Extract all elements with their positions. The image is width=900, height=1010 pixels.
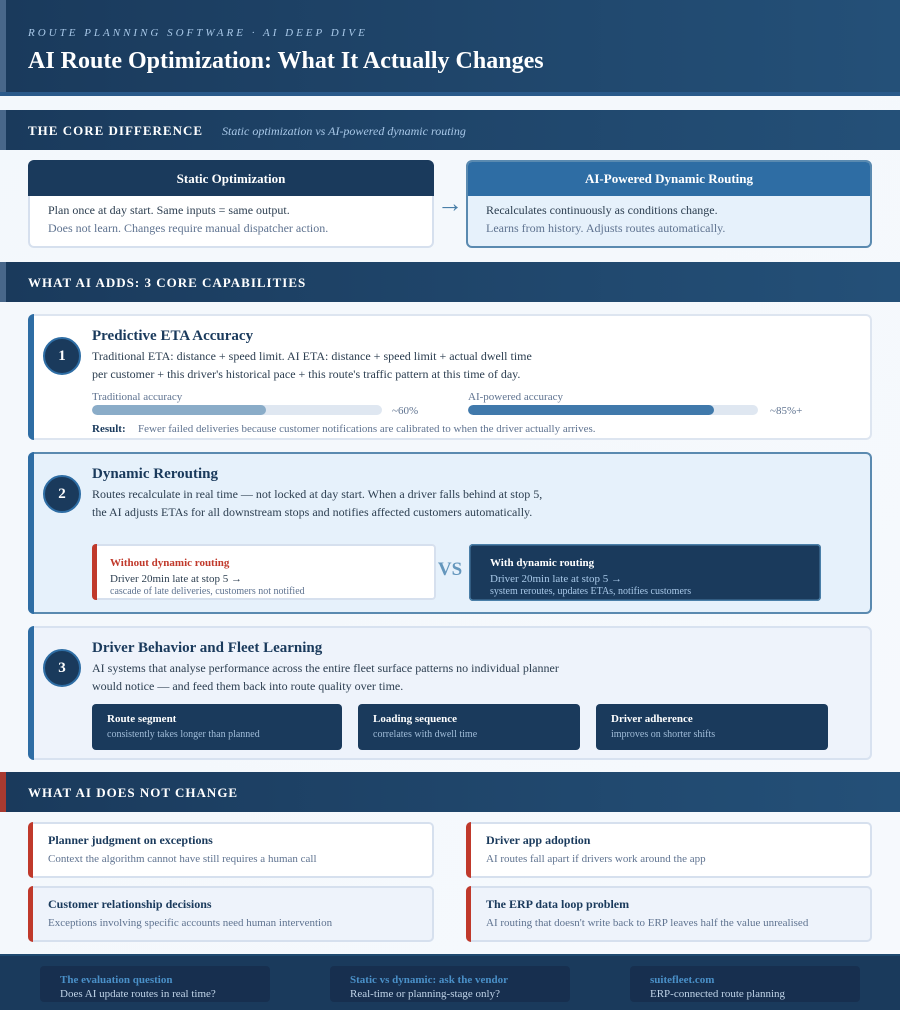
capability 1 description: per customer + this driver's historical pace + this route's traffic pattern at this time of day. — [92, 367, 520, 381]
chip: driver adherence: Driver adherence — [611, 713, 693, 725]
result line: Result: — [92, 423, 126, 435]
chip: loading sequence: Loading sequence — [373, 713, 457, 725]
card: planner judgment — [28, 822, 434, 878]
chip: route segment — [92, 704, 342, 750]
capability 1 title: Predictive ETA Accuracy — [92, 328, 253, 344]
card: customer relationship — [28, 886, 434, 942]
arrow: static to dynamic: → — [437, 189, 463, 218]
panel: capability 1 predictive ETA — [28, 314, 872, 440]
static heading — [28, 160, 434, 196]
capability 1 description — [92, 349, 532, 381]
footer — [0, 954, 900, 1010]
footer: suitefleet: suitefleet.com — [650, 974, 714, 986]
section heading: what AI adds: WHAT AI ADDS: 3 CORE CAPABILITIES — [28, 275, 306, 290]
panel: static optimization — [28, 160, 434, 248]
capability 2 description: Routes recalculate in real time — not locked at day start. When a driver falls behind at stop 5, — [92, 487, 542, 501]
header banner — [0, 0, 900, 96]
card: customer relationship: Customer relationship decisions — [48, 897, 212, 911]
card: driver app adoption: AI routes fall apart if drivers work around the app — [486, 853, 706, 865]
chip: driver adherence: improves on shorter shifts — [611, 729, 715, 740]
without dynamic routing box: Without dynamic routing — [110, 557, 229, 569]
card: planner judgment: Planner judgment on exceptions — [48, 833, 213, 847]
dynamic heading: AI-Powered Dynamic Routing — [585, 171, 753, 186]
bar: AI-powered accuracy — [468, 391, 802, 417]
VS label: VS — [438, 559, 462, 580]
footer: ask the vendor: Real-time or planning-stage only? — [350, 988, 500, 1000]
capability 2 description — [92, 487, 542, 519]
bar: traditional accuracy: Traditional accuracy — [92, 391, 182, 403]
with dynamic routing box — [469, 544, 821, 601]
number badge 1 — [43, 337, 81, 375]
static text — [48, 203, 328, 235]
chip: route segment: Route segment — [107, 713, 176, 725]
card: ERP data loop: The ERP data loop problem — [486, 897, 629, 911]
with dynamic routing box: With dynamic routing — [490, 557, 594, 569]
dynamic heading — [466, 160, 872, 196]
capability 1 description: Traditional ETA: distance + speed limit. AI ETA: distance + speed limit + actual dwell time — [92, 349, 532, 363]
panel: AI-powered dynamic routing — [466, 160, 872, 248]
card: driver app adoption — [466, 822, 872, 878]
card: planner judgment: Context the algorithm cannot have still requires a human call — [48, 853, 317, 865]
section heading: what AI adds — [0, 262, 900, 302]
bar: AI-powered accuracy: AI-powered accuracy — [468, 391, 563, 403]
with dynamic routing box: Driver 20min late at stop 5 → — [490, 573, 622, 585]
without dynamic routing box: cascade of late deliveries, customers not notified — [110, 586, 305, 597]
capability 3 description: would notice — and feed them back into route quality over time. — [92, 679, 403, 693]
title: AI Route Optimization: What It Actually Changes — [28, 48, 544, 74]
card: ERP data loop: AI routing that doesn't write back to ERP leaves half the value unrealised — [486, 917, 808, 929]
chip: loading sequence: correlates with dwell time — [373, 729, 477, 740]
footer: ask the vendor: Static vs dynamic: ask the vendor — [350, 974, 508, 986]
card: customer relationship: Exceptions involving specific accounts need human intervention — [48, 917, 332, 929]
result line: Fewer failed deliveries because customer notifications are calibrated to when the driver actually arrives. — [138, 423, 596, 435]
footer: ask the vendor — [330, 966, 570, 1002]
section heading: the core difference — [0, 110, 900, 150]
section heading: what AI does not change — [0, 772, 900, 812]
footer: evaluation question: The evaluation question — [60, 974, 172, 986]
without dynamic routing box — [92, 544, 436, 600]
bar: AI-powered accuracy: ~85%+ — [770, 405, 802, 417]
capability 3 title: Driver Behavior and Fleet Learning — [92, 640, 322, 656]
card: ERP data loop — [466, 886, 872, 942]
section heading: what AI does not change: WHAT AI DOES NOT CHANGE — [28, 785, 238, 800]
dynamic text — [486, 203, 725, 235]
chip: route segment: consistently takes longer than planned — [107, 729, 260, 740]
with dynamic routing box: system reroutes, updates ETAs, notifies customers — [490, 586, 691, 597]
static heading: Static Optimization — [177, 171, 285, 186]
section heading: the core difference: THE CORE DIFFERENCE — [28, 123, 203, 138]
number badge 3: 3 — [58, 660, 66, 676]
number badge 3 — [43, 649, 81, 687]
footer: suitefleet — [630, 966, 860, 1002]
capability 3 description: AI systems that analyse performance across the entire fleet surface patterns no individual planner — [92, 661, 559, 675]
eyebrow: ROUTE PLANNING SOFTWARE · AI DEEP DIVE — [28, 27, 368, 39]
footer: evaluation question: Does AI update routes in real time? — [60, 988, 216, 1000]
footer: suitefleet: ERP-connected route planning — [650, 988, 785, 1000]
static text: Does not learn. Changes require manual dispatcher action. — [48, 221, 328, 235]
bar: traditional accuracy: ~60% — [392, 405, 418, 417]
dynamic text: Learns from history. Adjusts routes automatically. — [486, 221, 725, 235]
static text: Plan once at day start. Same inputs = same output. — [48, 203, 290, 217]
chip: driver adherence — [596, 704, 828, 750]
number badge 2 — [43, 475, 81, 513]
capability 2 title: Dynamic Rerouting — [92, 466, 218, 482]
capability 3 description — [92, 661, 559, 693]
number badge 1: 1 — [58, 348, 66, 364]
section subtitle: Static optimization vs AI-powered dynamic routing — [222, 124, 466, 138]
without dynamic routing box: Driver 20min late at stop 5 → — [110, 573, 242, 585]
footer: evaluation question — [40, 966, 270, 1002]
panel: capability 3 driver behavior — [28, 626, 872, 760]
dynamic text: Recalculates continuously as conditions change. — [486, 203, 718, 217]
panel: capability 2 dynamic rerouting — [28, 452, 872, 614]
capability 2 description: the AI adjusts ETAs for all downstream stops and notifies affected customers automatically. — [92, 505, 532, 519]
card: driver app adoption: Driver app adoption — [486, 833, 590, 847]
number badge 2: 2 — [58, 486, 66, 502]
chip: loading sequence — [358, 704, 580, 750]
bar: traditional accuracy — [92, 391, 418, 417]
